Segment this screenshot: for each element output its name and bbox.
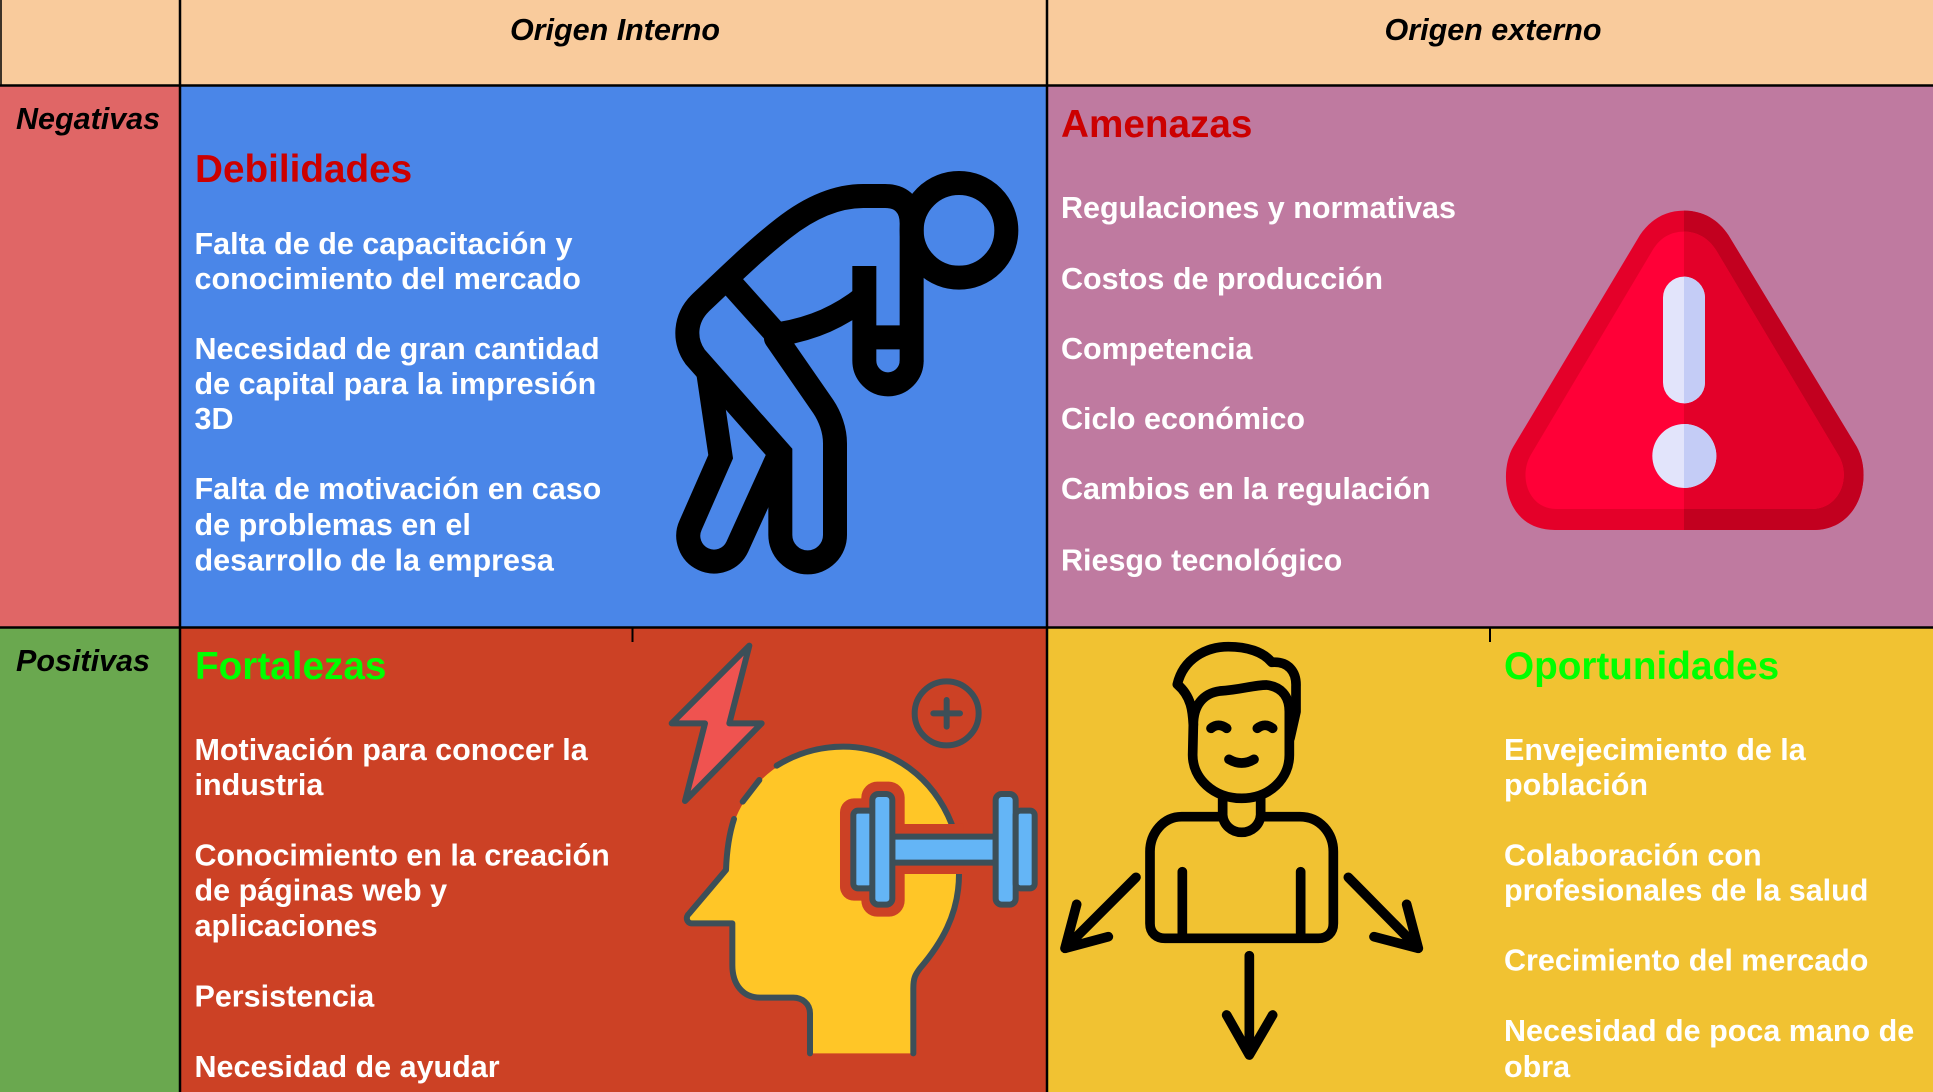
list: amenazas: Costos de producción <box>1061 262 1383 296</box>
panel: Fortalezas <box>180 627 1047 1092</box>
list: oportunidades: Colaboración con <box>1504 838 1762 872</box>
list: fortalezas: Motivación para conocer la <box>194 733 589 767</box>
icon part: head silhouette <box>687 747 959 1053</box>
panel: Amenazas <box>1047 85 1933 627</box>
heading: Fortalezas: Fortalezas <box>195 645 386 688</box>
list: debilidades: desarrollo de la empresa <box>194 544 555 578</box>
list: amenazas: Regulaciones y normativas <box>1061 191 1456 225</box>
icon part: plus in circle <box>915 681 979 745</box>
list: fortalezas: industria <box>194 768 324 802</box>
icon part: dumbbell <box>853 794 1035 905</box>
list: debilidades: Falta de motivación en caso <box>194 472 601 506</box>
list: debilidades: Falta de de capacitación y <box>194 227 573 261</box>
heading: Amenazas: Amenazas <box>1061 103 1252 146</box>
list: amenazas: Competencia <box>1061 332 1254 366</box>
list: oportunidades: Envejecimiento de la <box>1504 733 1807 767</box>
icon: warning triangle <box>1506 211 1864 530</box>
list: amenazas: Ciclo económico <box>1061 402 1305 436</box>
list: debilidades: conocimiento del mercado <box>194 262 581 296</box>
list: fortalezas: aplicaciones <box>194 909 378 943</box>
list: oportunidades: obra <box>1504 1050 1571 1084</box>
row label panel: Positivas <box>0 627 180 1092</box>
list: fortalezas: Conocimiento en la creación <box>194 838 610 872</box>
heading: Oportunidades: Oportunidades <box>1504 645 1779 688</box>
list: amenazas: Cambios en la regulación <box>1061 472 1430 506</box>
panel: Oportunidades <box>1047 627 1933 1092</box>
icon part: head outline <box>687 747 959 1053</box>
heading: Debilidades: Debilidades <box>195 148 412 191</box>
column heading: Origen Interno: Origen Interno <box>510 13 720 47</box>
header row <box>0 0 1933 85</box>
list: oportunidades: Crecimiento del mercado <box>1504 944 1868 978</box>
list: fortalezas: Necesidad de ayudar <box>194 1050 500 1084</box>
row label text: Negativas: Negativas <box>16 102 160 136</box>
icon: head with dumbbell <box>672 646 1035 1053</box>
list: oportunidades <box>1504 733 1914 1084</box>
icon: man with three arrows <box>1065 647 1418 1055</box>
list: oportunidades: Necesidad de poca mano de <box>1504 1014 1914 1048</box>
row label text: Positivas: Positivas <box>16 644 150 678</box>
list: debilidades: Necesidad de gran cantidad <box>194 332 600 366</box>
list: fortalezas: Persistencia <box>194 980 375 1014</box>
icon part: dumbbell halo <box>840 782 963 917</box>
list: debilidades: de capital para la impresión <box>194 367 596 401</box>
icon: tired person bending over <box>687 183 1006 562</box>
list: debilidades <box>194 227 601 578</box>
list: debilidades: 3D <box>194 402 234 436</box>
list: oportunidades: población <box>1504 768 1648 802</box>
list: debilidades: de problemas en el <box>194 508 471 542</box>
row label panel: Negativas <box>0 85 180 627</box>
list: amenazas: Riesgo tecnológico <box>1061 544 1342 578</box>
list: fortalezas: de páginas web y <box>194 874 447 908</box>
list: fortalezas <box>194 733 610 1084</box>
column heading: Origen externo: Origen externo <box>1385 13 1601 47</box>
list: oportunidades: profesionales de la salud <box>1504 874 1868 908</box>
list: amenazas <box>1061 191 1456 578</box>
panel: Debilidades <box>180 85 1047 627</box>
icon part: lightning bolt <box>672 646 762 801</box>
